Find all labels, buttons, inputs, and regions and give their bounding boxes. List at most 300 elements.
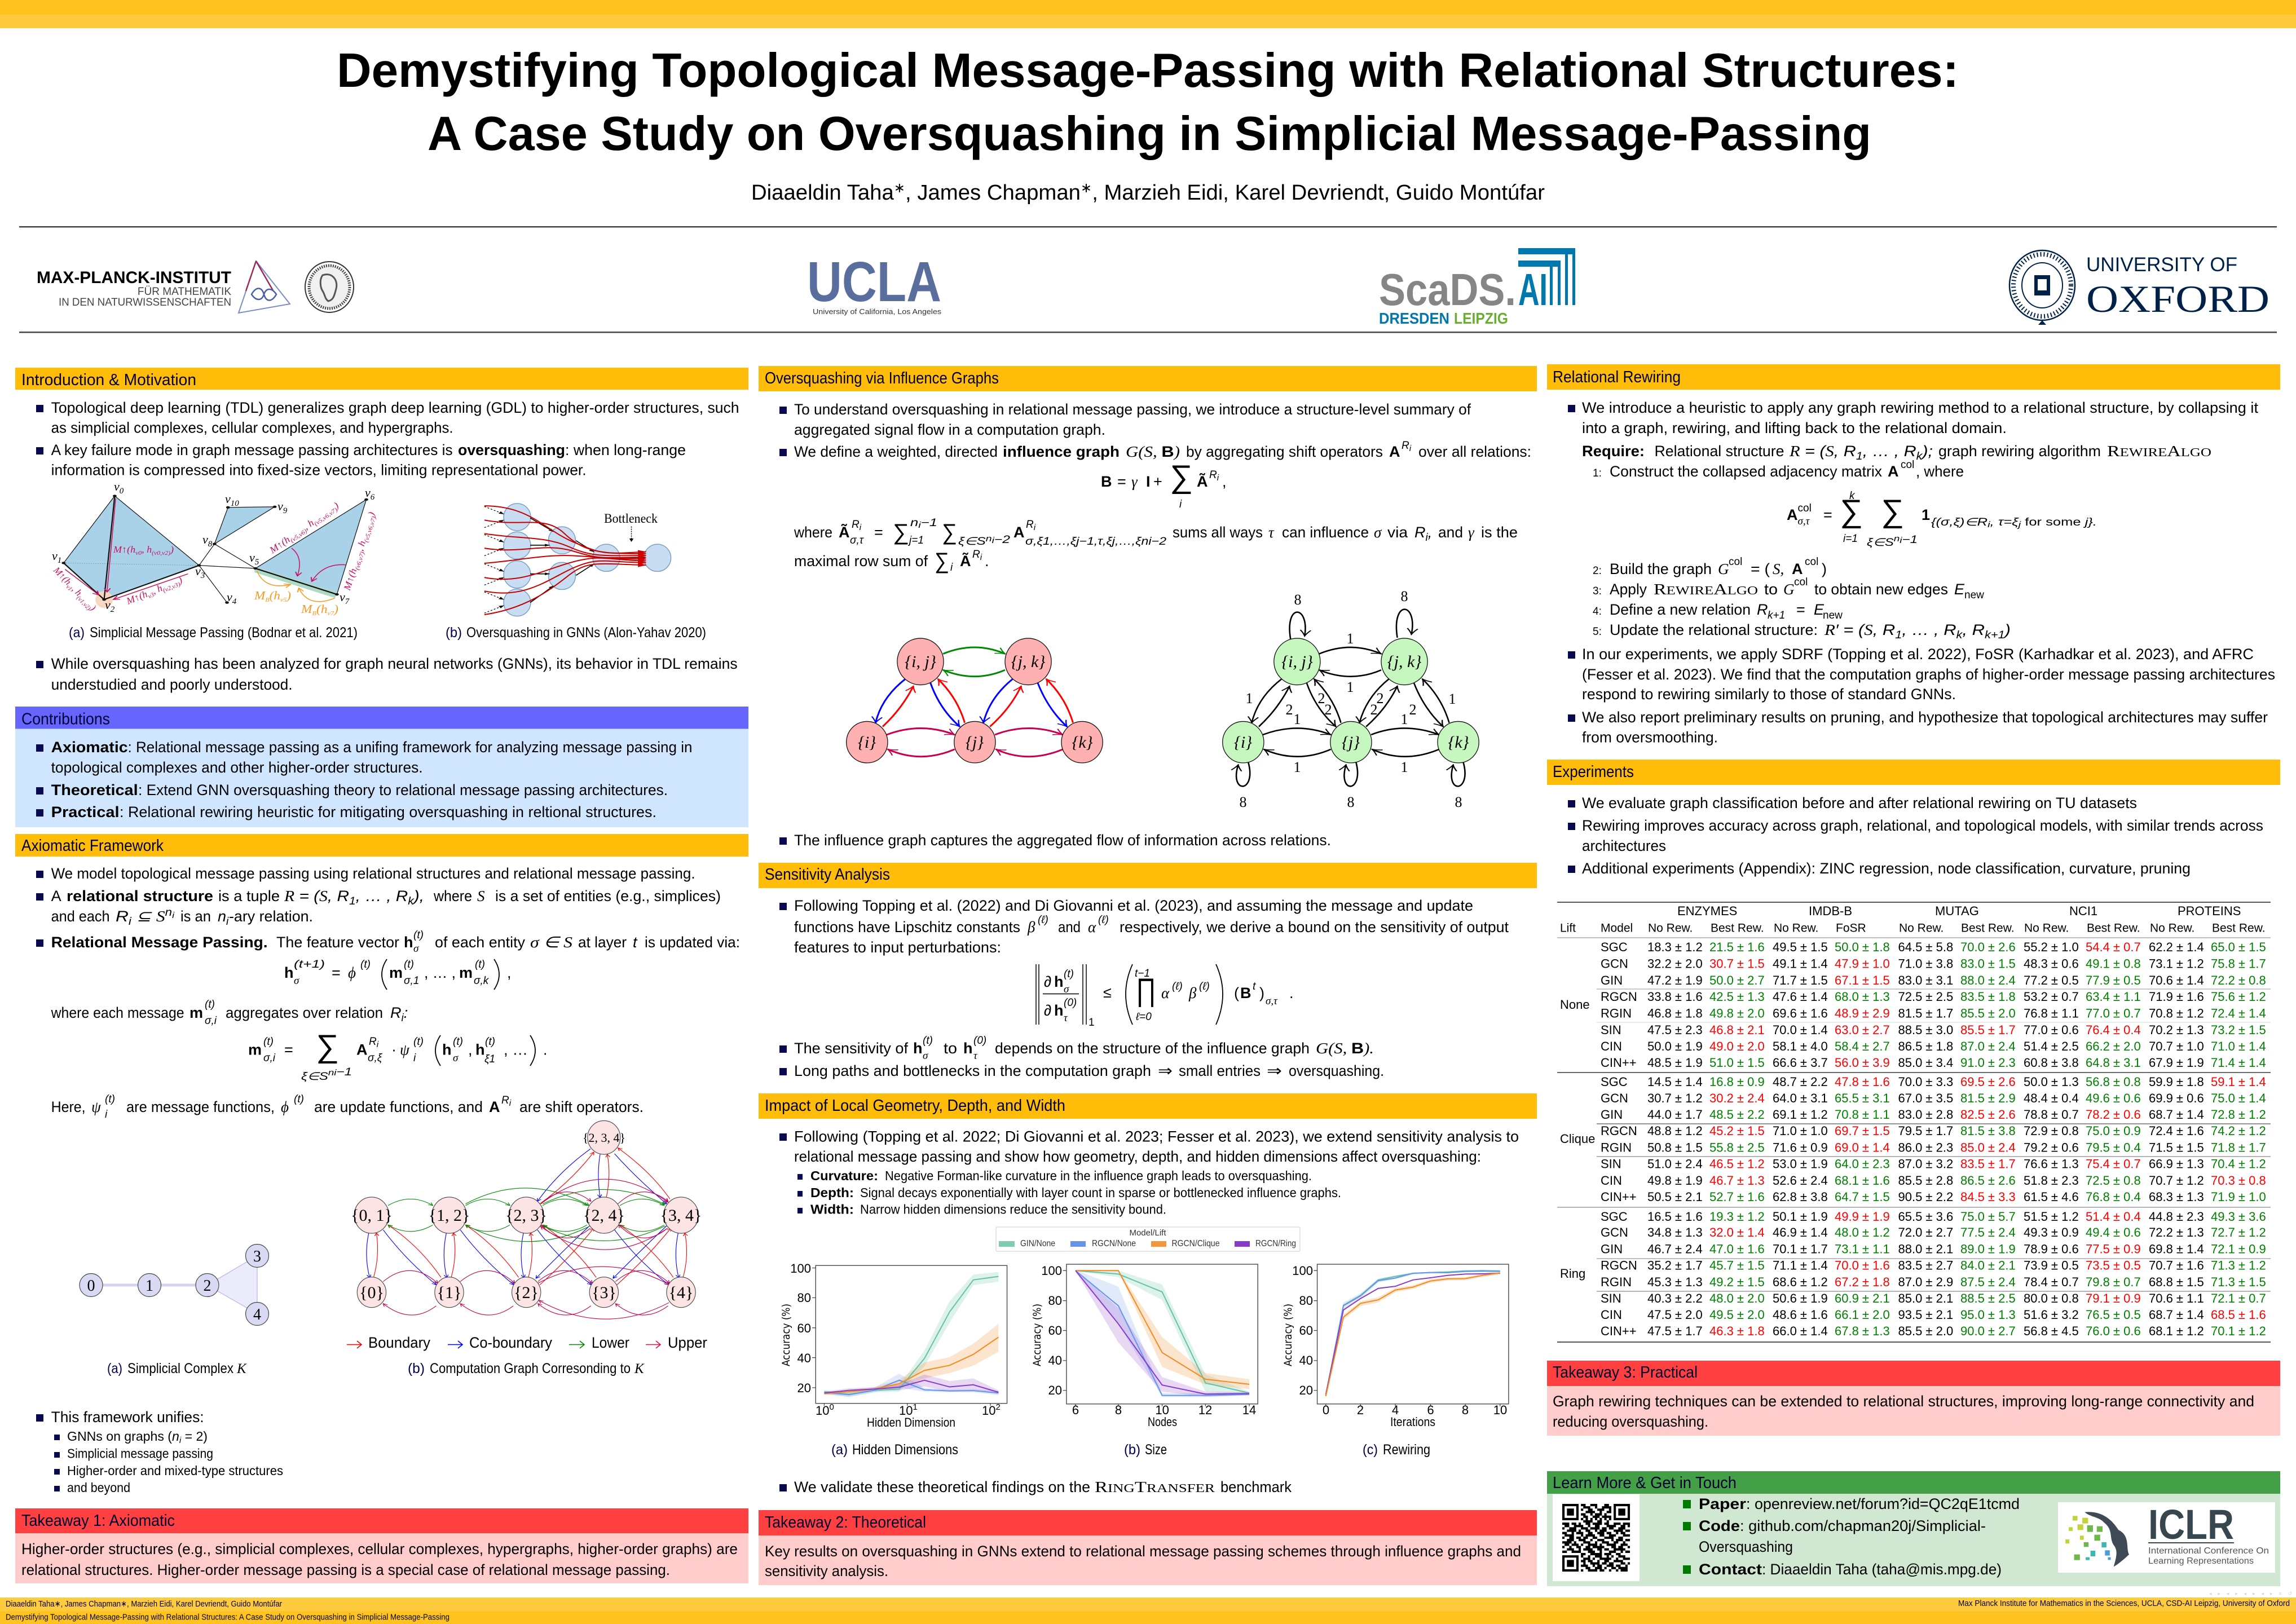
text: aggregated shift operators: Ã [960,552,971,570]
equation: update rule: (t) [404,959,414,970]
results table: 79.2 ± 0.6 [2024,1141,2079,1155]
algorithm: rewiring steps: to [1764,581,1778,598]
captions: charts: (c) [1363,1442,1378,1458]
results table: 49.3 ± 0.9 [2024,1225,2079,1239]
results table: 68.1 ± 1.6 [1835,1173,1890,1188]
results table: 78.2 ± 0.6 [2086,1107,2141,1122]
text: Lipschitz assumption: α [1088,919,1096,935]
results table: 49.0 ± 2.0 [1709,1039,1765,1053]
figure: simplicial message passing: v0 [135,550,142,557]
legend: relation types: Upper [668,1334,707,1351]
results table: 32.0 ± 1.4 [1709,1225,1765,1239]
figure: simplicial message passing: v7 [328,610,334,617]
results table: 49.5 ± 1.5 [1773,940,1828,954]
equation: message definition: (t) [413,1036,424,1048]
text: relational structure definition: is updated via: [645,934,740,951]
text: intro bullets: Topological deep learning (TDL) generalizes graph deep learning (GDL) to higher-order structures, such [51,399,739,416]
equation: update rule: (t+1) [294,959,325,970]
text: notation: A [489,1098,500,1115]
results table: 71.5 ± 1.5 [2149,1141,2204,1155]
results table: 33.8 ± 1.6 [1647,990,1703,1004]
text: notation: i [509,1098,512,1108]
panel: oversquashing via influence graphs [759,366,1537,849]
equation: update rule: m [459,964,473,981]
text: aggregated shift operators: j=1 [907,535,924,546]
results table: 76.5 ± 0.5 [2086,1308,2141,1322]
text: relational structure definition: σ [413,943,419,955]
results table: 79.1 ± 0.9 [2086,1291,2141,1305]
equation: message definition: A [356,1042,368,1058]
text: links [1683,1495,2020,1578]
diagram: influence graph with weights: 2 [1324,701,1332,718]
text: experiments note: (Fesser et al. 2023). We find that the computation graphs of higher-order message passing architectures [1582,666,2275,683]
chart: hidden dimensions: 100 [790,1261,811,1276]
results table: 72.5 ± 2.5 [1898,990,1953,1004]
results table: 71.3 ± 1.5 [2211,1275,2266,1289]
equation: sensitivity bound: σ,τ [1266,995,1278,1007]
results table: 35.2 ± 1.7 [1647,1259,1703,1273]
results table: 90.0 ± 2.7 [1960,1324,2016,1338]
equation: sensitivity bound: ∂ [1044,1002,1051,1019]
figure: simplicial message passing: 1 [58,556,61,565]
results table: 56.8 ± 4.5 [2024,1324,2079,1338]
text: notation: (t) [294,1093,304,1105]
results table: 72.1 ± 0.9 [2211,1242,2266,1256]
results table: Lift [1560,922,1576,935]
heading [759,1093,1537,1119]
results table: 67.9 ± 1.9 [2149,1056,2204,1070]
algorithm: rewiring steps: Relational structure [1655,443,1784,460]
results table: 45.2 ± 1.5 [1709,1124,1765,1138]
results table: 71.3 ± 1.2 [2211,1259,2266,1273]
text: Higher-order structures (e.g., simplicial complexes, cellular complexes, hypergraphs, higher-order graphs) are [21,1541,738,1557]
figure: simplicial message passing: M↑(h [267,535,290,555]
text: sensitivity consequences [779,1035,1384,1080]
equation: message definition [248,1028,548,1083]
logo: Max Planck Institute: MAX-PLANCK-INSTITUT [37,268,231,287]
algorithm: rewiring steps: S, [1773,561,1784,577]
results table: 49.6 ± 0.6 [2086,1091,2141,1105]
diagram: influence graph with weights: {j, k} [1387,652,1421,671]
logo: Max Planck Institute: IN DEN NATURWISSENSCHAFTEN [59,297,231,308]
text: sensitivity consequences: The sensitivity of [794,1040,908,1057]
chart: hidden dimensions: Accuracy (%) [780,1304,792,1366]
equation: B matrix: , [1222,473,1227,490]
algorithm: rewiring steps: Construct the collapsed adjacency matrix [1610,463,1882,480]
chart: rewiring: 40 [1299,1353,1313,1367]
results table: No Rew. [2150,922,2194,935]
results table: 82.5 ± 2.6 [1960,1107,2016,1122]
text: Lipschitz assumption [779,897,1509,956]
results table: 30.7 ± 1.5 [1709,957,1765,971]
text: contribution list: Theoretical [51,782,138,798]
text: aggregated shift operators: R [1414,524,1426,541]
figure: simplicial message passing: M [301,602,311,616]
heading [15,368,748,390]
results table: 64.5 ± 5.8 [1898,940,1953,954]
legend: relation types: Boundary [368,1334,430,1351]
results table: 48.5 ± 1.9 [1647,1056,1703,1070]
logo: Max Planck Institute: FÜR MATHEMATIK [138,286,231,298]
text: aggregated shift operators: = [874,524,883,541]
equation: B matrix: I [1146,473,1151,490]
results table: Model [1601,922,1633,935]
equation: message definition: σ [453,1052,459,1064]
text: framework unifies: GNNs on graphs (n [67,1429,179,1444]
results table: 32.2 ± 2.0 [1647,957,1703,971]
diagram: influence graph with weights: 8 [1455,794,1462,810]
equation: collapsed adjacency: −1 [1902,534,1918,546]
results table: 69.0 ± 1.4 [1835,1141,1890,1155]
text: aggregated shift operators: σ,τ [850,535,865,546]
figure: simplicial message passing: 4 [232,597,237,606]
footer banner: Diaaeldin Taha∗, James Chapman∗, Marzieh Eidi, Karel Devriendt, Guido Montúfar [6,1599,282,1609]
equation: message definition: , [468,1042,473,1058]
algorithm: rewiring steps: 1: [1593,467,1602,479]
figure: simplicial message passing: ) [88,603,98,613]
text: contribution list: : Relational message passing as a unifing framework for analyzing message passing in [127,739,693,756]
figure: simplicial message passing: 8 [208,540,213,549]
results table: 65.5 ± 3.1 [1835,1091,1890,1105]
text: relational structure definition: R [116,908,126,925]
equation: B matrix: i [1179,498,1182,510]
results table: 48.9 ± 2.9 [1835,1007,1890,1021]
results table: 74.2 ± 1.2 [2211,1124,2266,1138]
text: message aggregation: i [402,1012,404,1024]
heading: Oversquashing via Influence Graphs [765,369,999,387]
text: extension list: relational message passing and show how geometry, depth, and hidden dimensions affect oversquashing: [794,1148,1481,1165]
figure: computation graph [351,1120,702,1319]
results table: 71.7 ± 1.5 [1773,973,1828,987]
equation: sensitivity bound: ≤ [1103,984,1112,1001]
equation: collapsed adjacency: {(σ,ξ)∈R [1931,517,1973,528]
text: links: : Diaaeldin Taha (taha@mis.mpg.de) [1762,1561,2002,1578]
chart: size [1031,1264,1258,1429]
diagram: relation graph: {j} [966,733,984,752]
text: message aggregation: σ,i [205,1015,217,1027]
figure: simplicial message passing: v1 [64,584,73,593]
chart: hidden dimensions: Hidden Dimension [867,1415,955,1429]
captions: charts [831,1442,1430,1458]
chart: rewiring: 0 [1323,1403,1329,1417]
equation: message definition: i [377,1040,379,1049]
text: Lipschitz assumption: (ℓ) [1038,914,1048,926]
results table: 77.9 ± 0.5 [2086,973,2141,987]
heading: Takeaway 2: Theoretical [765,1513,926,1532]
results table: 48.7 ± 2.2 [1773,1075,1828,1089]
captions: intro figures [69,625,706,641]
results table: 48.5 ± 2.2 [1709,1107,1765,1122]
text: links: : github.com/chapman20j/Simplicial- [1740,1517,1986,1534]
diagram: relation graph: {j, k} [1011,652,1045,671]
text: experiments note: In our experiments, we apply SDRF (Topping et al. 2022), FoSR (Karhadkar et al. 2023), and AFRC [1582,646,2254,663]
results table: 47.5 ± 2.0 [1647,1308,1703,1322]
results table: 81.5 ± 1.7 [1898,1007,1953,1021]
results table: RGCN [1601,1259,1637,1273]
results table: 77.0 ± 0.7 [2086,1007,2141,1021]
equation: message definition: σ,ξ [368,1052,383,1064]
figure: computation graph: {3} [592,1283,616,1302]
text: Lipschitz assumption: features to input perturbations: [794,939,1001,956]
results table: 73.9 ± 0.5 [2024,1259,2079,1273]
text: notation: are update functions, and [314,1098,483,1115]
results table: GIN [1601,1242,1623,1256]
figure: oversquashing in GNNs: Bottleneck [604,511,658,526]
text: relational structure definition: k [408,895,415,907]
panel: sensitivity analysis [759,863,1537,1080]
diagram: influence graph with weights: 8 [1240,794,1246,810]
text: notation: ψ [91,1098,102,1115]
text: relational structure definition: at layer [578,934,627,951]
figure: computation graph: {0, 1} [351,1206,393,1225]
text: experiments note: from oversmoothing. [1582,729,1718,745]
text: sensitivity consequences: depends on the structure of the influence graph [995,1040,1310,1057]
results table: 63.0 ± 2.7 [1835,1023,1890,1037]
text: validation: RING TRANSFER [1095,1479,1215,1495]
results table: 68.7 ± 1.4 [2149,1107,2204,1122]
results table: GIN [1601,1107,1623,1122]
equation: B matrix: = [1117,473,1126,490]
results table: GIN [1601,973,1623,987]
text: sensitivity consequences: to [944,1040,957,1057]
algorithm: rewiring steps: ) [1822,561,1827,577]
captions: framework figures: (a) [107,1361,122,1376]
equation: collapsed adjacency: 1 [1922,506,1930,523]
equation: update rule: (t) [360,959,371,970]
results table: No Rew. [1648,922,1693,935]
diagram: influence graph with weights: 1 [1448,691,1456,707]
results table: SIN [1601,1291,1621,1305]
nodes: simplex states [354,1120,698,1308]
equation: message definition: (t) [263,1036,274,1048]
results table: 49.8 ± 2.0 [1709,1007,1765,1021]
results table: 59.1 ± 1.4 [2211,1075,2266,1089]
results table: 48.6 ± 1.6 [1773,1308,1828,1322]
diagram: influence graph with weights: 2 [1409,701,1417,718]
results table: 70.7 ± 1.2 [2149,1173,2204,1188]
text: extension list [779,1128,1519,1217]
equation: message definition: −1 [337,1066,352,1078]
results table: 47.5 ± 2.3 [1647,1023,1703,1037]
text: contribution list: Practical [51,804,120,820]
results table: 85.0 ± 2.1 [1898,1291,1953,1305]
results table: 49.3 ± 3.6 [2211,1210,2266,1224]
algorithm: rewiring steps: k [1956,629,1963,641]
equation: collapsed adjacency: i [1987,520,1990,529]
equation: B matrix: B [1101,473,1112,490]
logo: ICLR: ICLR [2148,1501,2234,1548]
text: aggregated shift operators: R [1026,519,1034,531]
diagram: influence graph with weights: {k} [1448,733,1469,752]
results table: 51.6 ± 3.2 [2024,1308,2079,1322]
figure: simplicial message passing: , h [301,517,316,532]
algorithm: rewiring steps: , … , R [1902,621,1956,638]
text: aggregated shift operators: ∑ [942,520,957,545]
results table: PROTEINS [2178,904,2241,918]
chart: hidden dimensions: 10 [982,1404,995,1418]
results table: 67.2 ± 1.8 [1835,1275,1890,1289]
results table: 53.2 ± 0.7 [2024,990,2079,1004]
equation: collapsed adjacency: , τ=ξ [1990,517,2020,528]
text: framework unifies: This framework unifies: [51,1409,204,1426]
captions: charts: Hidden Dimensions [852,1442,958,1458]
text: intro bullets [36,399,739,478]
text: relational structure definition: of each entity [435,934,525,951]
heading: Contributions [21,710,110,729]
results table: 47.2 ± 1.9 [1647,973,1703,987]
heading: Introduction & Motivation [21,371,196,389]
text: influence graph definition: To understand oversquashing in relational message passing, we introduce a structure-level summary of [794,401,1471,418]
text: aggregated shift operators: τ [1268,524,1275,541]
text: contribution list: : Relational rewiring heuristic for mitigating oversquashing in reltional structures. [120,804,656,820]
text: influence graph definition: by aggregating shift operators [1186,443,1383,460]
logo: University of Oxford: OXFORD [2086,277,2269,320]
results table: 48.0 ± 2.0 [1709,1291,1765,1305]
authors: Diaaeldin Taha [751,181,893,205]
text: relational structure definition: ⊆ [131,908,156,925]
figure: simplicial message passing: (v2,v3) [162,581,182,594]
logo: UCLA: UCLA [807,250,941,314]
results table: 46.7 ± 1.3 [1709,1173,1765,1188]
results table: 42.5 ± 1.3 [1709,990,1765,1004]
results table: IMDB-B [1809,904,1852,918]
results table: 68.3 ± 1.3 [2149,1190,2204,1204]
text: aggregated shift operators: σ [1374,524,1382,541]
text: aggregated shift operators: ∑ [893,520,909,545]
algorithm: rewiring steps: , … , R [1863,443,1916,460]
results table: 89.0 ± 1.9 [1960,1242,2016,1256]
chart: rewiring: 2 [1357,1403,1364,1417]
diagram: influence graph with weights: 1 [1401,711,1408,727]
figure: simplicial message passing: , h [142,544,152,555]
equation: update rule: σ,k [474,975,490,987]
text: influence summary: The influence graph captures the aggregated flow of information across relations. [794,832,1331,849]
results table: 71.9 ± 1.6 [2149,990,2204,1004]
figure: computation graph: {2, 3} [505,1206,547,1225]
logo: ICLR: International Conference On [2148,1546,2269,1556]
text: intro bullets: as simplicial complexes, cellular complexes, and hypergraphs. [51,420,453,436]
text: links: : openreview.net/forum?id=QC2qE1tcmd [1746,1495,2020,1512]
equation: message definition: = [284,1042,293,1058]
diagram: influence graph with weights: {i, j} [1281,652,1313,671]
results table: 87.0 ± 2.4 [1960,1039,2016,1053]
text: extension list: Width: [810,1202,854,1217]
results table: 49.4 ± 0.6 [2086,1225,2141,1239]
text: Lipschitz assumption: and [1058,919,1081,935]
results table: 53.0 ± 1.9 [1773,1157,1828,1171]
results table: 86.0 ± 2.3 [1898,1141,1953,1155]
legend: relation types [347,1334,707,1351]
algorithm: rewiring steps: new [1964,589,1984,601]
results table: 79.5 ± 1.7 [1898,1124,1953,1138]
results table: 50.0 ± 1.9 [1647,1039,1703,1053]
algorithm: rewiring steps: = [1796,601,1805,618]
text: influence graph definition: aggregated signal flow in a computation graph. [794,421,1105,438]
chart: size: 40 [1048,1353,1062,1367]
results table: Best Rew. [2087,922,2140,935]
chart: size: 10 [1155,1403,1169,1417]
results table: 72.4 ± 1.4 [2211,1007,2266,1021]
results table: 69.5 ± 2.6 [1960,1075,2016,1089]
chart: rewiring: 20 [1299,1383,1313,1397]
equation: message definition: n [328,1068,334,1078]
text: aggregated shift operators: i [980,553,982,562]
algorithm: rewiring steps: graph rewiring algorithm [1938,443,2101,460]
results table: 45.7 ± 1.5 [1709,1259,1765,1273]
text: aggregated shift operators: Ã [839,523,849,541]
captions: framework figures: (b) [408,1361,425,1376]
figure: computation graph: {2, 3, 4} [583,1131,625,1145]
algorithm: rewiring steps: col [1729,556,1742,568]
heading [15,834,748,857]
text: relational structure definition: i [129,916,132,928]
text: intro bullets: A key failure mode in graph message passing architectures is [51,442,453,458]
results table: 69.6 ± 1.6 [1773,1007,1828,1021]
results table: 85.5 ± 2.0 [1960,1007,2016,1021]
results table: 51.0 ± 2.4 [1647,1157,1703,1171]
diagram: influence graph with weights: {i} [1234,733,1252,752]
results table: 46.3 ± 1.8 [1709,1324,1765,1338]
figure: simplicial message passing: M↑(h [113,544,134,555]
results table: 66.6 ± 3.7 [1773,1056,1828,1070]
results table: 51.4 ± 0.4 [2086,1210,2141,1224]
figure: simplicial message passing: ) [170,544,174,555]
diagram: influence graph with weights: 2 [1370,701,1377,718]
results table: SGC [1601,940,1628,954]
results table: 72.1 ± 0.7 [2211,1291,2266,1305]
text: experiments note: respond to rewiring similarly to those of standard GNNs. [1582,686,1956,703]
text: aggregated shift operators: i [1426,532,1428,544]
figure: simplicial message passing: (v1,v2) [75,594,92,612]
results table: 70.1 ± 1.2 [2211,1324,2266,1338]
results table: 65.0 ± 1.5 [2211,940,2266,954]
diagram: relation graph: {i} [858,733,876,752]
results table: 19.3 ± 1.2 [1709,1210,1765,1224]
heading [1547,760,2280,785]
text: aggregated shift operators: i [918,520,922,530]
logo: ScaDS.AI [1379,248,1575,327]
figure: computation graph: {1, 2} [429,1206,470,1225]
chart: size: 14 [1242,1403,1256,1417]
heading: Takeaway 3: Practical [1553,1363,1698,1382]
text: aggregated shift operators [794,517,1518,573]
text: aggregated shift operators: −2 [994,534,1011,546]
authors: , James Chapman [905,181,1081,205]
logo: ICLR: Learning Representations [2148,1556,2254,1566]
results table: 85.5 ± 1.7 [1960,1023,2016,1037]
equation: collapsed adjacency: j [2017,520,2021,529]
figure: simplicial complex K: 1 [146,1277,153,1295]
algorithm: rewiring steps: 3: [1593,585,1602,597]
figure: simplicial message passing: ) [333,602,338,616]
results table: 55.2 ± 1.0 [2024,940,2079,954]
results table: 72.4 ± 1.6 [2149,1124,2204,1138]
results table: 76.0 ± 0.6 [2086,1324,2141,1338]
results table: 70.7 ± 1.0 [2149,1039,2204,1053]
equation: sensitivity bound: (t) [1064,968,1074,980]
figure: simplicial message passing: 7 [345,597,350,606]
text: relational structure definition: σ ∈ S [530,934,573,951]
chart: size: 80 [1048,1294,1062,1308]
results table: 46.5 ± 1.2 [1709,1157,1765,1171]
results table: 83.5 ± 1.7 [1960,1157,2016,1171]
panel: introduction and motivation [15,368,748,693]
results table: 60.8 ± 3.8 [2024,1056,2079,1070]
diagram: influence graph with weights [1223,588,1479,810]
text: Lipschitz assumption: Following Topping et al. (2022) and Di Giovanni et al. (2023), and assuming the message and update [794,897,1473,914]
text: message aggregation: (t) [205,999,215,1010]
text: sensitivity consequences: G(S, B). [1316,1040,1374,1057]
